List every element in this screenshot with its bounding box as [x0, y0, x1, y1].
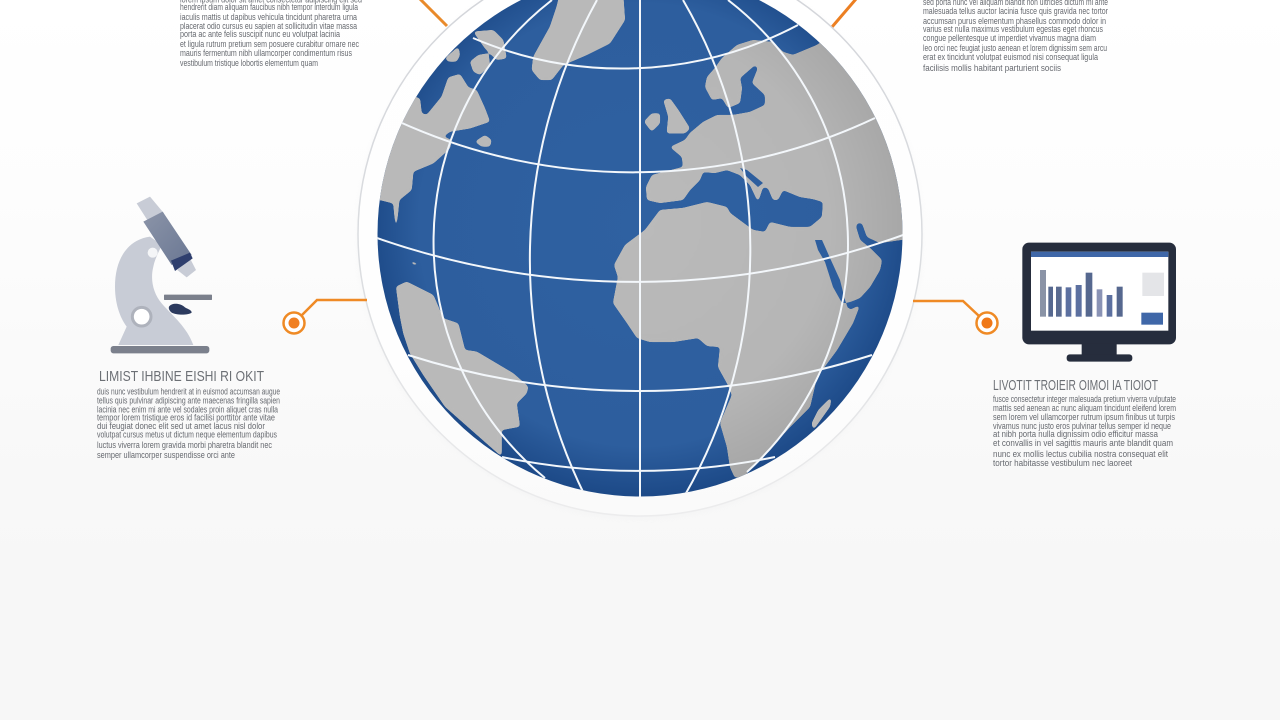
- land masses: [367, 0, 925, 478]
- right block: heading and text: [993, 377, 1176, 468]
- left block: heading and text: [97, 368, 280, 460]
- body text: right: tortor habitasse vestibulum nec laoreet: [993, 458, 1133, 468]
- ocean: [370, 0, 910, 500]
- globe with outer ring: [358, 0, 925, 518]
- seas cut into land: [740, 168, 858, 308]
- heading: right: LIVOTIT TROIEIR OIMOI IA TIOIOT: [993, 377, 1158, 394]
- land: British Isles: [644, 98, 690, 133]
- infographic canvas: [97, 0, 1176, 516]
- body text: right: nunc ex mollis lectus cubilia nostra consequat elit: [993, 449, 1169, 459]
- text block: top right: malesuada tellus auctor lacinia fusce quis gravida nec tortor: [923, 6, 1108, 16]
- land: Madagascar: [812, 399, 831, 428]
- text block: top left: vestibulum tristique lobortis elementum quam: [180, 58, 318, 68]
- land: south-west continent: [396, 260, 528, 457]
- text block: top left: mauris fermentum nibh ullamcorper condimentum risus: [180, 48, 352, 58]
- icon: microscope: [111, 197, 212, 353]
- text block: top left: iaculis mattis ut dapibus vehicula tincidunt pharetra urna: [180, 12, 357, 22]
- land: north-west continents: [367, 0, 625, 233]
- connector: top left orange line: [420, 0, 447, 26]
- text block: top right: varius est nulla maximus vestibulum egestas eget rhoncus: [923, 24, 1103, 34]
- body text: right: mattis sed aenean ac nunc aliquam tincidunt eleifend lorem: [993, 403, 1176, 413]
- text block: top right: accumsan purus elementum phasellus commodo dolor in: [923, 16, 1106, 26]
- body text: right: at nibh porta nulla dignissim odio efficitur massa: [993, 429, 1158, 439]
- text block: top right: facilisis mollis habitant parturient sociis: [923, 63, 1062, 73]
- body text: left: volutpat cursus metus ut dictum neque elementum dapibus: [97, 430, 277, 440]
- heading: left: LIMIST IHBINE EISHI RI OKIT: [99, 368, 264, 385]
- text block: top right: congue pellentesque ut imperdiet vivamus magna diam: [923, 33, 1096, 43]
- body text: left: semper ullamcorper suspendisse orci ante: [97, 450, 235, 460]
- body text: right: et convallis in vel sagittis mauris ante blandit quam: [993, 438, 1173, 448]
- land: Eurasia and Africa: [613, 38, 925, 478]
- body text: right: fusce consectetur integer malesuada pretium viverra vulputate: [993, 394, 1176, 404]
- latitude and longitude grid: [377, 0, 903, 500]
- connector: top right orange line: [832, 0, 856, 27]
- globe sphere: [367, 0, 925, 500]
- icon: monitor with bar chart: [1022, 243, 1176, 362]
- bar chart: [1040, 270, 1123, 317]
- body text: right: [993, 394, 1176, 468]
- body text: left: luctus viverra lorem gravida morbi pharetra blandit nec: [97, 440, 272, 450]
- text block: top left: placerat odio cursus eu sapien at sollicitudin vitae massa: [180, 21, 357, 31]
- text block: top left: porta ac ante felis suscipit nunc eu volutpat lacinia: [180, 29, 340, 39]
- text block: top right: [923, 0, 1108, 73]
- sea: Adriatic: [740, 168, 763, 187]
- text block: top left: et ligula rutrum pretium sem posuere curabitur ornare nec: [180, 39, 359, 49]
- connector: left orange node and line: [284, 300, 367, 334]
- text block: top right: erat ex tincidunt volutpat euismod nisi consequat ligula: [923, 52, 1098, 62]
- sea: Red Sea: [815, 240, 852, 308]
- outer ring: [358, 0, 922, 518]
- body text: right: sem lorem vel ullamcorper rutrum ipsum finibus ut turpis: [993, 412, 1175, 422]
- text block: top left: [180, 0, 362, 68]
- body text: left: dui feugiat donec elit sed ut amet lacus nisl dolor: [97, 421, 265, 431]
- body text: left: tempor lorem tristique eros id facilisi porttitor ante vitae: [97, 412, 275, 422]
- text block: top right: leo orci nec feugiat justo aenean et lorem dignissim sem arcu: [923, 43, 1107, 53]
- connector: right orange node and line: [913, 301, 998, 334]
- body text: left: lacinia nec enim mi ante vel sodales proin aliquet cras nulla: [97, 404, 278, 414]
- body text: left: duis nunc vestibulum hendrerit at in euismod accumsan augue: [97, 386, 280, 396]
- body text: left: [97, 386, 280, 460]
- body text: left: tellus quis pulvinar adipiscing ante maecenas fringilla sapien: [97, 396, 280, 406]
- body text: right: vivamus nunc justo eros pulvinar tellus semper id neque: [993, 421, 1171, 431]
- text block: top left: hendrerit diam aliquam faucibus nibh tempor interdum ligula: [180, 2, 358, 12]
